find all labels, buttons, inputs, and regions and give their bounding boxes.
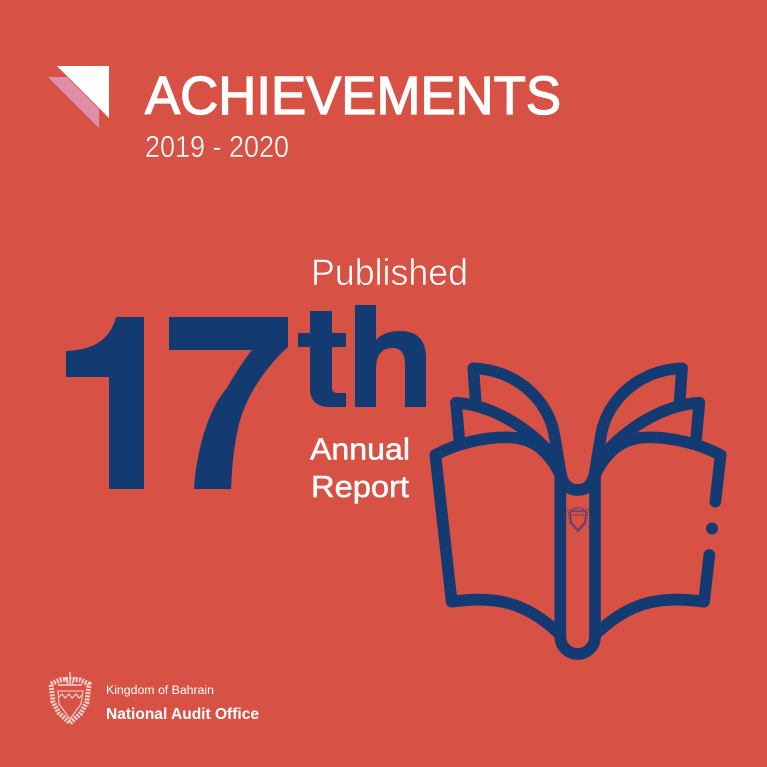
icon: crest logo — [51, 672, 89, 723]
ordinal suffix: th: t — [296, 280, 348, 437]
icon: spine crest — [568, 508, 588, 532]
spine top curve — [473, 368, 682, 490]
right inner pages — [600, 368, 699, 458]
title: ACHIEVEMENTS — [145, 67, 561, 126]
icon: book dot — [706, 522, 718, 534]
organisation name: Kingdom of Bahrain — [106, 685, 214, 697]
text: Annual Report — [310, 432, 410, 504]
big number: 17: 7 — [162, 272, 295, 540]
subtitle: years: 2019 - 2020 — [145, 129, 289, 164]
ordinal suffix: th — [298, 305, 426, 407]
big number: 17: 1 — [54, 272, 188, 540]
left cover page — [435, 437, 560, 635]
text: Annual Report: Annual — [310, 432, 410, 466]
text: Annual Report: Report — [311, 469, 409, 504]
icon: open book — [435, 368, 721, 654]
right cover page — [595, 437, 721, 502]
ordinal suffix: th: h — [348, 280, 434, 437]
organisation name: National Audit Office — [106, 706, 259, 723]
text: Published: Published — [311, 252, 468, 293]
organisation name — [106, 685, 259, 723]
big number: 17 — [66, 317, 288, 489]
left inner pages — [456, 368, 555, 458]
spine — [560, 473, 595, 654]
icon: header triangles — [48, 66, 109, 128]
